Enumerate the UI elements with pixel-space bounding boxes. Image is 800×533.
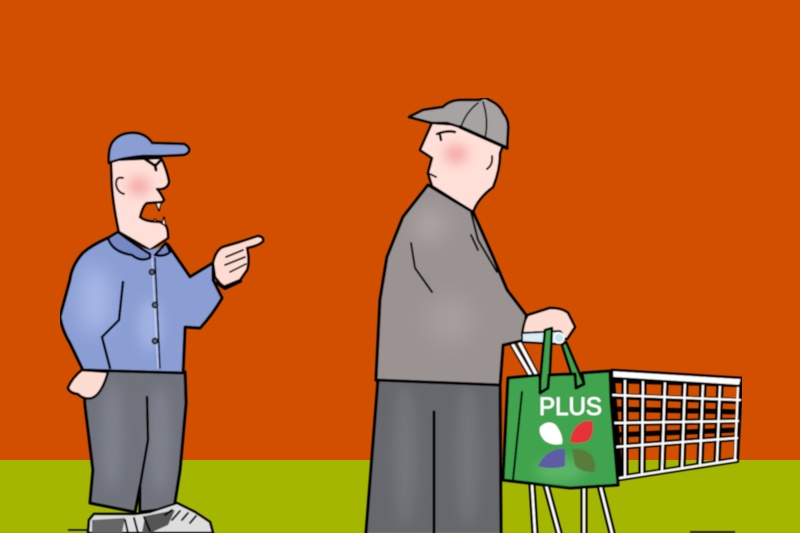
collar (108, 232, 170, 259)
right man (366, 98, 575, 533)
cart handle struts (513, 342, 536, 374)
bag handles (539, 328, 584, 394)
cheek (128, 177, 150, 195)
handle tube (522, 331, 563, 344)
cart (513, 342, 742, 533)
right man hand (522, 308, 575, 339)
cart legs (532, 485, 612, 533)
sleeve fold (102, 282, 123, 368)
left man pointing hand (213, 236, 263, 288)
cart top rail (612, 370, 742, 386)
buttons (149, 269, 158, 344)
bag fold (513, 392, 522, 480)
left man cap (109, 133, 189, 163)
floor marks (68, 530, 735, 532)
drawn figures (60, 98, 742, 533)
ear (487, 156, 492, 169)
floor (0, 460, 800, 533)
ear (116, 178, 124, 194)
right man cap (409, 98, 508, 148)
right man trousers (366, 380, 501, 533)
bag label: PLUS (539, 393, 602, 421)
brow and eye (437, 131, 455, 140)
left man shirt (60, 232, 222, 373)
bag body (503, 371, 618, 488)
left man shoes (88, 503, 213, 533)
left man trousers (83, 370, 186, 512)
left man (60, 133, 263, 533)
cheek (444, 145, 468, 163)
left man lowered hand (68, 370, 108, 398)
mouth (430, 174, 436, 177)
logo leaves (538, 421, 595, 472)
sweater folds (411, 212, 497, 292)
teeth (153, 203, 166, 226)
right man sweater (376, 185, 526, 385)
shopping bag (503, 328, 618, 488)
left man face (111, 157, 169, 250)
angry brow and eye (142, 157, 160, 170)
cart basket grid (612, 380, 740, 478)
right man face (420, 123, 505, 212)
